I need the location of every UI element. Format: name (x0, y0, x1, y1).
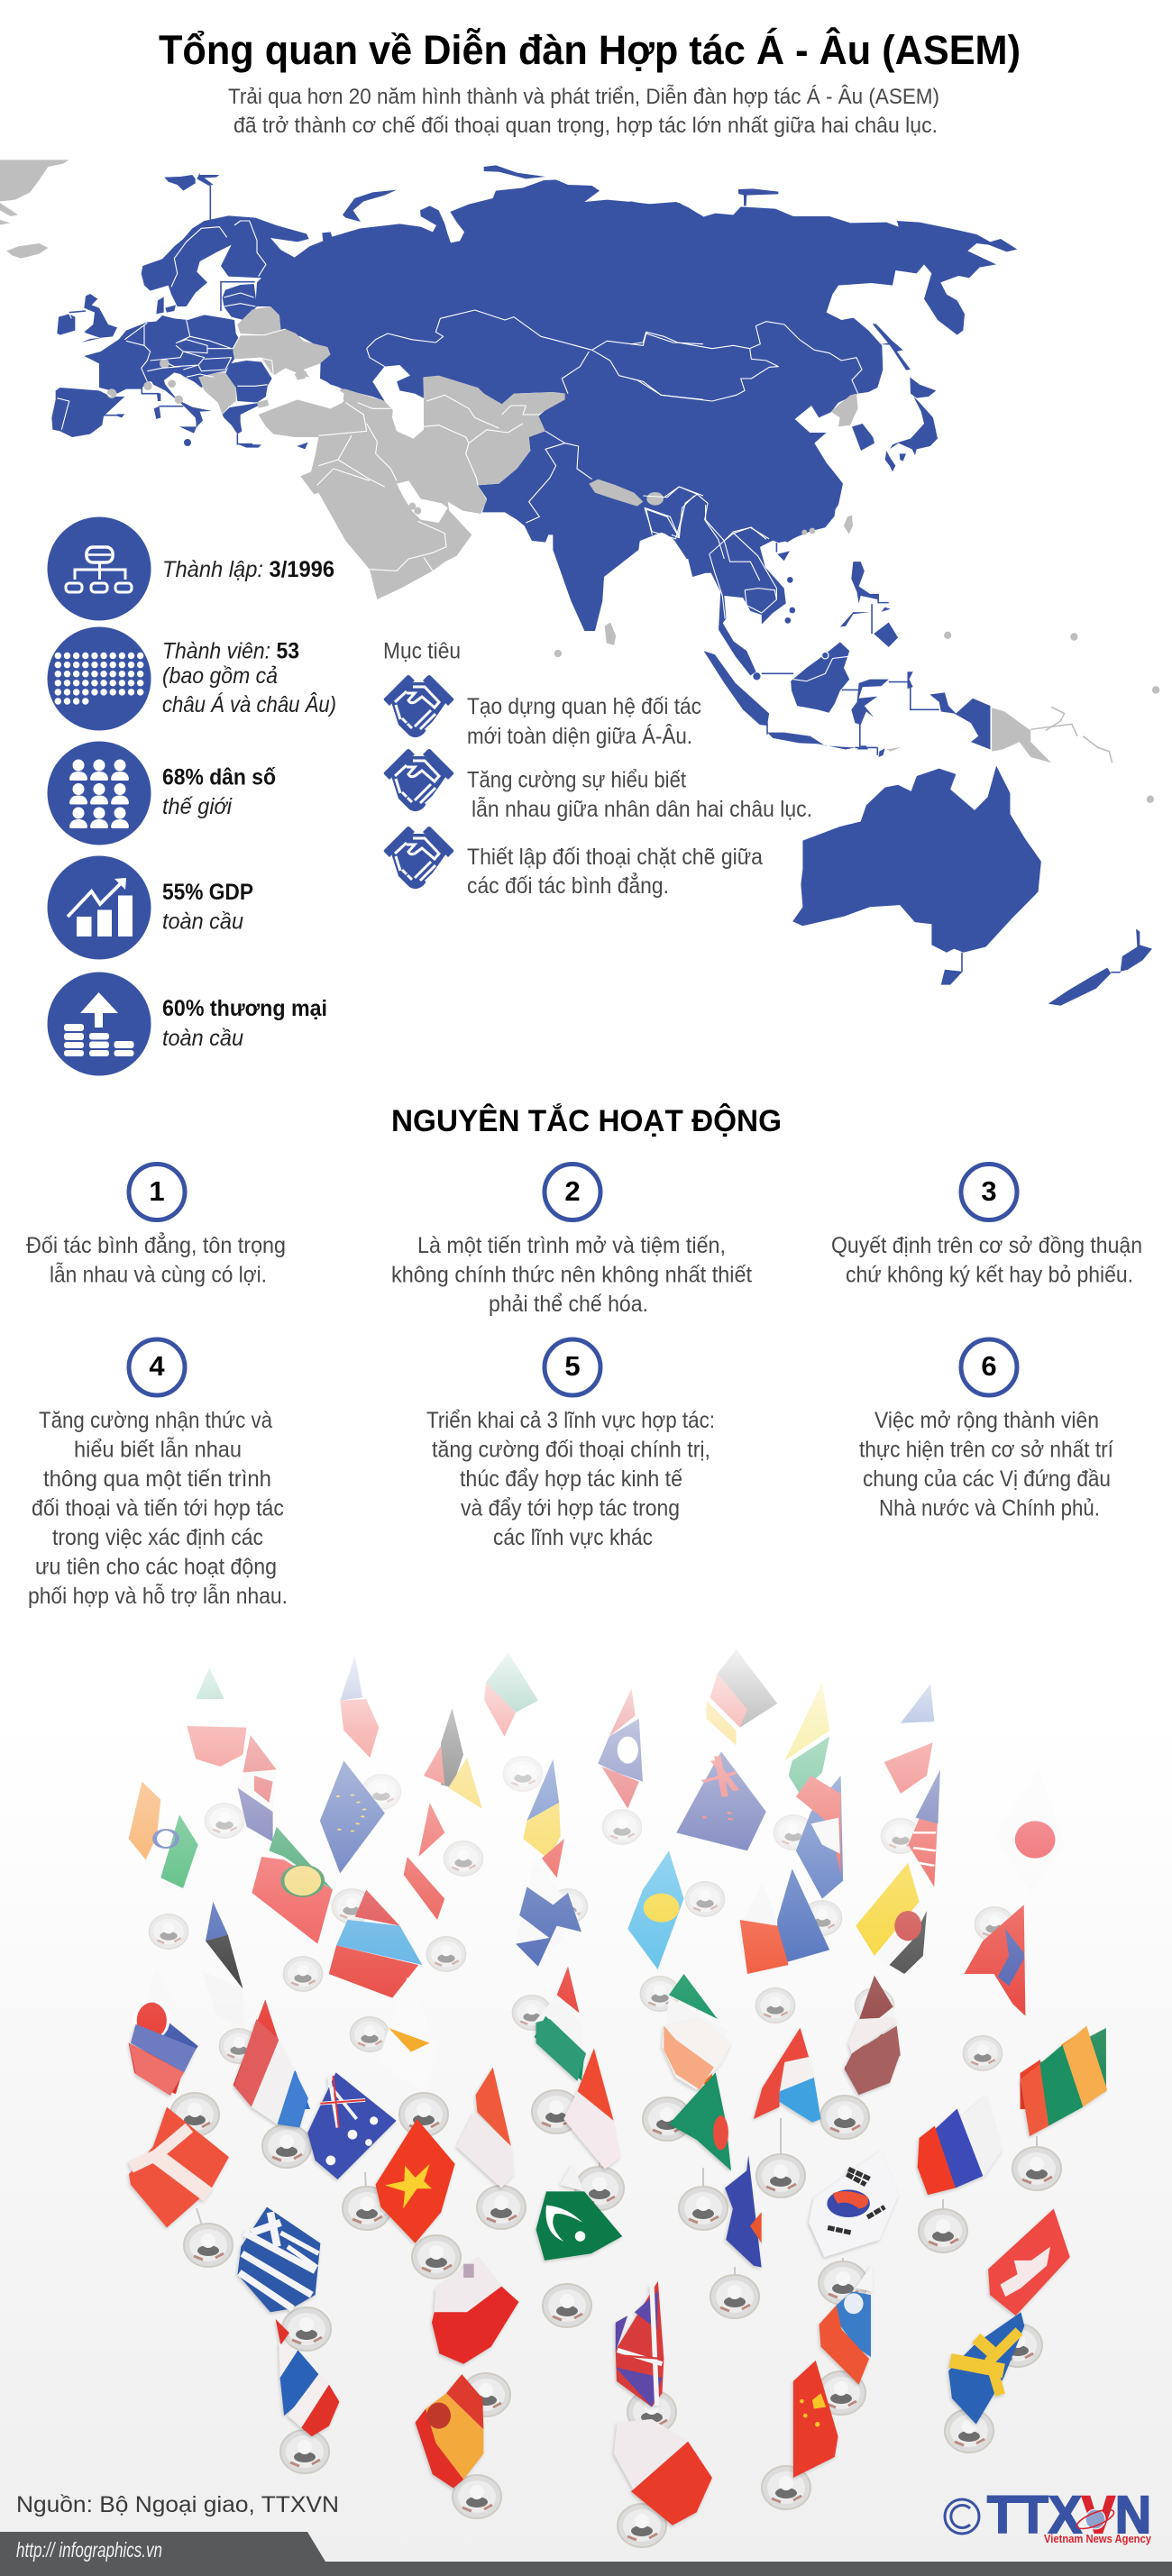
illustration: ASEM member table flags (0, 1640, 1172, 2562)
panel: principle 5 (426, 1339, 715, 1550)
text: trade: 60% thương mại (162, 996, 327, 1021)
text: principle 2: không chính thức nên không nhất thiết (391, 1262, 752, 1287)
text: objective 2: Tăng cường sự hiểu biết (467, 768, 686, 793)
text: objective 3: Thiết lập đối thoại chặt chẽ giữa (467, 845, 763, 870)
panel: principle 2 (391, 1165, 752, 1317)
text: principle 5: tăng cường đối thoại chính trị, (432, 1437, 710, 1462)
stat: population (47, 741, 276, 845)
blue landmass: South-East Asia, Australia, New Zealand (642, 501, 1152, 1006)
text: principle 4: trong việc xác định các (52, 1525, 263, 1550)
number badge 2: 2 (564, 1175, 581, 1207)
text: principle 5: các lĩnh vực khác (493, 1525, 653, 1550)
text: principle 4: ưu tiên cho các hoạt động (35, 1554, 277, 1579)
text: principle 2: phải thể chế hóa. (489, 1292, 648, 1317)
text: principle 1 (26, 1231, 286, 1287)
icon: organisation chart (47, 517, 151, 620)
number badge 6 (961, 1339, 1017, 1395)
text: principle 2: Là một tiến trình mở và tiệm tiến, (417, 1233, 726, 1258)
icon: handshake (384, 749, 453, 811)
objective 2 (384, 749, 812, 822)
text: principle 6: chung của các Vị đứng đầu (863, 1466, 1111, 1492)
upper flag bases (149, 1757, 1014, 2070)
number badge 1: 1 (149, 1175, 165, 1207)
objective 1 (384, 675, 701, 749)
text: principle 4: phối hợp và hỗ trợ lẫn nhau. (28, 1583, 288, 1609)
title: Tổng quan về Diễn đàn Hợp tác Á - Âu (ASEM) (159, 27, 1021, 73)
text: trade (162, 996, 327, 1051)
text: objective 3 (467, 845, 763, 899)
website url: http:// infographics.vn (16, 2538, 162, 2562)
text: principle 3: Quyết định trên cơ sở đồng thuận (831, 1233, 1142, 1258)
heading: operating principles: NGUYÊN TẮC HOẠT ĐỘNG (391, 1103, 782, 1138)
text: principle 5: thúc đẩy hợp tác kinh tế (460, 1466, 682, 1492)
number badge 5 (545, 1339, 600, 1395)
subtitle: Trải qua hơn 20 năm hình thành và phát triển, Diễn đàn hợp tác Á - Âu (ASEM) (228, 85, 939, 109)
lower flags: right half (614, 2017, 1107, 2526)
panel: principle 1 (26, 1165, 286, 1287)
panel: principle 6 (859, 1339, 1113, 1521)
stat: GDP (47, 856, 253, 959)
text: GDP: toàn cầu (162, 909, 243, 934)
blue landmass: east Russia, China, Japan, Korea (559, 188, 1017, 559)
white fade over upper flags (0, 1640, 1172, 2091)
lower flag bases (170, 2090, 1061, 2547)
blue landmass: Russia, Kazakhstan, India (320, 165, 703, 631)
text: principle 4: hiểu biết lẫn nhau (74, 1437, 242, 1462)
objectives heading: Mục tiêu (383, 638, 461, 663)
lower flags: left half (129, 2019, 622, 2488)
text: principle 6: Việc mở rộng thành viên (874, 1408, 1099, 1433)
panel: objectives (383, 638, 812, 899)
number badge 4 (129, 1339, 185, 1395)
number badge 1 (129, 1165, 185, 1220)
number badge 4: 4 (149, 1350, 165, 1382)
number badge 6: 6 (981, 1350, 997, 1382)
text: members: (bao gồm cả (162, 663, 278, 689)
text: principle 3 (831, 1233, 1142, 1287)
icon: people (47, 741, 151, 845)
text: members (162, 638, 336, 717)
subtitle: đã trở thành cơ chế đối thoại quan trọng, hợp tác lớn nhất giữa hai châu lục. (233, 114, 938, 138)
text: principle 5 (426, 1408, 715, 1550)
text: principle 4: Tăng cường nhận thức và (39, 1408, 272, 1433)
text: objective 2: lẫn nhau giữa nhân dân hai châu lục. (472, 796, 812, 822)
text: objective 1 (467, 694, 701, 749)
text: principle 6 (859, 1408, 1113, 1521)
footer bar with url tab (0, 2532, 1172, 2576)
grey Papua New Guinea, Sri Lanka, small island dots (554, 623, 1159, 803)
number badge 2 (545, 1165, 600, 1220)
globe emblem (1075, 2506, 1116, 2533)
upper flags, fading toward top (129, 1649, 1106, 2109)
logo: TTXVN Vietnam News Agency (945, 2486, 1151, 2545)
subtitle (228, 85, 939, 138)
text: population (162, 764, 276, 819)
text: principle 6: thực hiện trên cơ sở nhất trí (859, 1437, 1113, 1462)
text: principle 5: và đẩy tới hợp tác trong (461, 1496, 680, 1521)
text: objective 3: các đối tác bình đẳng. (467, 872, 669, 899)
number badge 3 (961, 1165, 1017, 1220)
text: trade: toàn cầu (162, 1026, 243, 1051)
text: members: Thành viên: 53 (162, 638, 299, 663)
connector lines to islands (762, 543, 1121, 973)
text: principle 4: đối thoại và tiến tới hợp tác (32, 1496, 284, 1521)
text: principle 5: Triển khai cả 3 lĩnh vực hợp tác: (426, 1408, 715, 1433)
connector lines in Europe (69, 186, 255, 444)
text: principle 1: lẫn nhau và cùng có lợi. (50, 1262, 267, 1287)
water bodies: Caspian, Persian Gulf, Black Sea (266, 365, 448, 523)
country borders (57, 221, 862, 681)
grey non-member countries: Middle East and Central Asia (259, 376, 664, 599)
text: population: thế giới (162, 794, 233, 819)
grey islands and North Korea, Taiwan (801, 394, 858, 535)
number badge 3: 3 (981, 1175, 997, 1207)
text: objective 1: Tạo dựng quan hệ đối tác (467, 694, 701, 719)
icon: handshake (384, 827, 453, 889)
text: principle 3: chứ không ký kết hay bỏ phiếu. (846, 1262, 1133, 1287)
tagline: Vietnam News Agency (1044, 2533, 1151, 2545)
text: members: châu Á và châu Âu) (162, 691, 336, 717)
source credit: Nguồn: Bộ Ngoại giao, TTXVN (16, 2492, 339, 2517)
text: principle 4: thông qua một tiến trình (43, 1466, 271, 1492)
map: ASEM members in blue, other countries in grey (0, 160, 1159, 1006)
wordmark: TTXVN (987, 2486, 1151, 2544)
icon: handshake (384, 675, 453, 737)
lower flag poles (197, 2118, 1037, 2297)
icon: member dots (47, 627, 151, 730)
copyright mark (945, 2499, 979, 2534)
stat: members (47, 627, 336, 730)
text: principle 1: Đối tác bình đẳng, tôn trọng (26, 1231, 286, 1258)
text: GDP: 55% GDP (162, 880, 253, 905)
number badge 5: 5 (564, 1350, 581, 1382)
text: principle 4 (28, 1408, 288, 1609)
stat: trade (47, 972, 327, 1076)
text: principle 2 (391, 1233, 752, 1317)
objective 3 (384, 827, 763, 899)
text: population: 68% dân số (162, 764, 276, 790)
icon: rising bar chart (47, 856, 151, 959)
stat: founded (47, 517, 334, 620)
panel: principle 3 (831, 1165, 1142, 1287)
text: GDP (162, 880, 253, 934)
icon: coins with up arrow (47, 972, 151, 1076)
text: objective 1: mới toàn diện giữa Á-Âu. (467, 723, 692, 749)
blue landmass: Europe (51, 173, 361, 449)
grey non-member countries: Europe side (0, 160, 331, 415)
text: objective 2 (467, 768, 812, 822)
text: founded: Thành lập: 3/1996 (162, 557, 334, 582)
text: principle 6: Nhà nước và Chính phủ. (879, 1496, 1100, 1521)
panel: key figures (47, 517, 336, 1076)
panel: principle 4 (28, 1339, 288, 1609)
